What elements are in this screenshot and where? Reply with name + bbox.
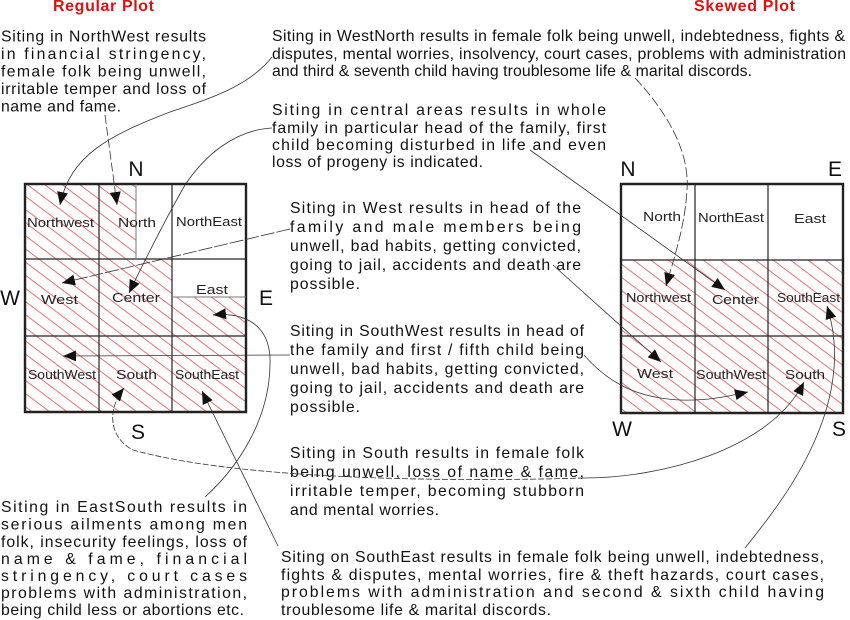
room labels: skewed plot: West — [637, 367, 674, 381]
arrow: SouthEast to SouthEast regular — [202, 391, 278, 546]
text: EastSouth: serious ailments among men — [1, 516, 247, 534]
text: SouthWest: possible. — [290, 399, 360, 416]
text: NorthWest: Siting in NorthWest results — [1, 28, 206, 46]
room labels: skewed plot: SouthEast — [777, 291, 841, 305]
text: NorthWest: name and fame. — [1, 98, 121, 116]
text: SouthWest: going to jail, accidents and death are — [290, 380, 584, 397]
compass letters: skewed plot: W — [612, 418, 632, 441]
text: West: possible. — [290, 276, 360, 293]
text: West: family and male members being — [290, 219, 581, 236]
text: NorthWest: in financial stringency, — [1, 46, 206, 63]
text: SouthEast: fights & disputes, mental worries, fire & theft hazards, court cases, — [281, 567, 824, 584]
arrow: central to Center regular — [129, 128, 272, 293]
compass letters: regular plot: S — [131, 421, 145, 444]
room labels: regular plot: South — [116, 368, 157, 382]
text: EastSouth: being child less or abortions etc. — [1, 602, 244, 619]
text: SouthEast: problems with administration and second & sixth child having — [281, 584, 824, 601]
text: West: unwell, bad habits, getting convicted, — [290, 238, 581, 255]
text: WestNorth — [272, 28, 846, 80]
compass letters: skewed plot: N — [620, 158, 636, 181]
room labels: skewed plot — [626, 210, 841, 382]
room labels: regular plot: Northwest — [27, 216, 95, 230]
text: WestNorth: Siting in WestNorth results in female folk being unwell, indebtedness, fights & — [272, 28, 845, 45]
text: SouthWest — [290, 323, 585, 416]
room labels: skewed plot: East — [794, 212, 827, 226]
room labels: skewed plot: Northwest — [626, 291, 692, 305]
room labels: skewed plot: North — [643, 210, 681, 224]
text: EastSouth: stringency, court cases — [1, 568, 247, 585]
text: SouthEast: troublesome life & marital discords. — [281, 602, 551, 619]
text: SouthEast — [281, 549, 824, 619]
text: NorthWest: female folk being unwell, — [1, 64, 206, 80]
compass letters: skewed plot: E — [828, 158, 842, 181]
room labels: regular plot: SouthEast — [175, 368, 240, 382]
hatched region: regular plot — [25, 184, 246, 412]
text: SouthWest: unwell, bad habits, getting convicted, — [290, 361, 584, 378]
text: EastSouth: folk, insecurity feelings, loss of — [1, 534, 248, 551]
text: central areas: child becoming disturbed in life and even — [272, 137, 606, 154]
arrow: South to South skewed — [584, 382, 804, 478]
grid lines: skewed plot — [621, 184, 843, 413]
room labels: regular plot: East — [196, 283, 229, 297]
text: South: being unwell, loss of name & fame, — [290, 464, 584, 481]
room labels: skewed plot: Center — [712, 293, 759, 307]
arrow: SouthWest to SouthWest skewed — [584, 355, 748, 400]
compass letters: regular plot — [0, 158, 273, 444]
text: West: Siting in West results in head of the — [290, 200, 581, 217]
arrow: West to West regular — [62, 229, 290, 283]
text: WestNorth: disputes, mental worries, insolvency, court cases, problems with administration — [272, 46, 846, 63]
arrow: WestNorth to Northwest skewed — [635, 78, 687, 286]
text: SouthWest: the family and first / fifth child being — [290, 342, 584, 359]
room labels: regular plot: NorthEast — [176, 215, 243, 229]
text: central areas: loss of progeny is indicated. — [272, 154, 483, 171]
text: South — [290, 445, 584, 519]
text: central areas — [272, 102, 607, 171]
text: SouthWest: Siting in SouthWest results in head of — [290, 323, 585, 340]
room labels: regular plot: West — [41, 293, 79, 307]
panel: regular plot grid — [0, 158, 273, 444]
text: West — [290, 200, 581, 293]
compass letters: skewed plot: S — [832, 418, 846, 441]
compass letters: skewed plot — [612, 158, 846, 441]
text: South: irritable temper, becoming stubborn — [290, 483, 584, 500]
room labels: regular plot: SouthWest — [28, 368, 97, 382]
arrow: West to West skewed — [553, 265, 661, 362]
text: SouthEast: Siting on SouthEast results in female folk being unwell, indebtedness, — [281, 549, 824, 566]
room labels: skewed plot: SouthWest — [696, 368, 767, 382]
arrow: EastSouth to East regular — [205, 315, 270, 497]
arrow: central to Center skewed — [530, 150, 725, 290]
compass letters: regular plot: W — [0, 287, 20, 310]
room labels: regular plot: North — [118, 216, 156, 230]
text: EastSouth: name & fame, financial — [1, 551, 247, 568]
arrow: South to South regular — [113, 388, 584, 480]
grid lines: regular plot — [25, 184, 246, 412]
panel: skewed plot grid — [612, 158, 846, 441]
text: central areas: family in particular head of the family, first — [272, 120, 607, 137]
hatched region: skewed plot — [621, 260, 843, 413]
compass letters: regular plot: N — [128, 158, 144, 181]
text: EastSouth — [1, 499, 248, 619]
text: EastSouth: Siting in EastSouth results in — [1, 499, 247, 516]
text: NorthWest: irritable temper and loss of — [1, 81, 207, 98]
text: EastSouth: problems with administration, — [1, 585, 247, 602]
arrow: NorthWest to North regular — [105, 115, 117, 205]
text: NorthWest — [1, 28, 207, 116]
room labels: skewed plot: NorthEast — [698, 211, 765, 225]
arrow: SouthWest to SouthWest regular — [63, 355, 290, 356]
room labels: regular plot: Center — [112, 291, 160, 305]
text: South: and mental worries. — [290, 502, 439, 519]
text: central areas: Siting in central areas results in whole — [272, 102, 606, 119]
compass letters: regular plot: E — [259, 287, 273, 310]
arrow: WestNorth to Northwest regular — [60, 57, 272, 205]
arrow: SouthEast to SouthEast skewed — [745, 306, 834, 548]
room labels: regular plot — [27, 215, 243, 382]
text: South: Siting in South results in female folk — [290, 445, 584, 462]
text: West: going to jail, accidents and death are — [290, 257, 581, 274]
text: WestNorth: and third & seventh child having troublesome life & marital discords. — [272, 63, 752, 80]
room labels: skewed plot: South — [785, 368, 825, 382]
